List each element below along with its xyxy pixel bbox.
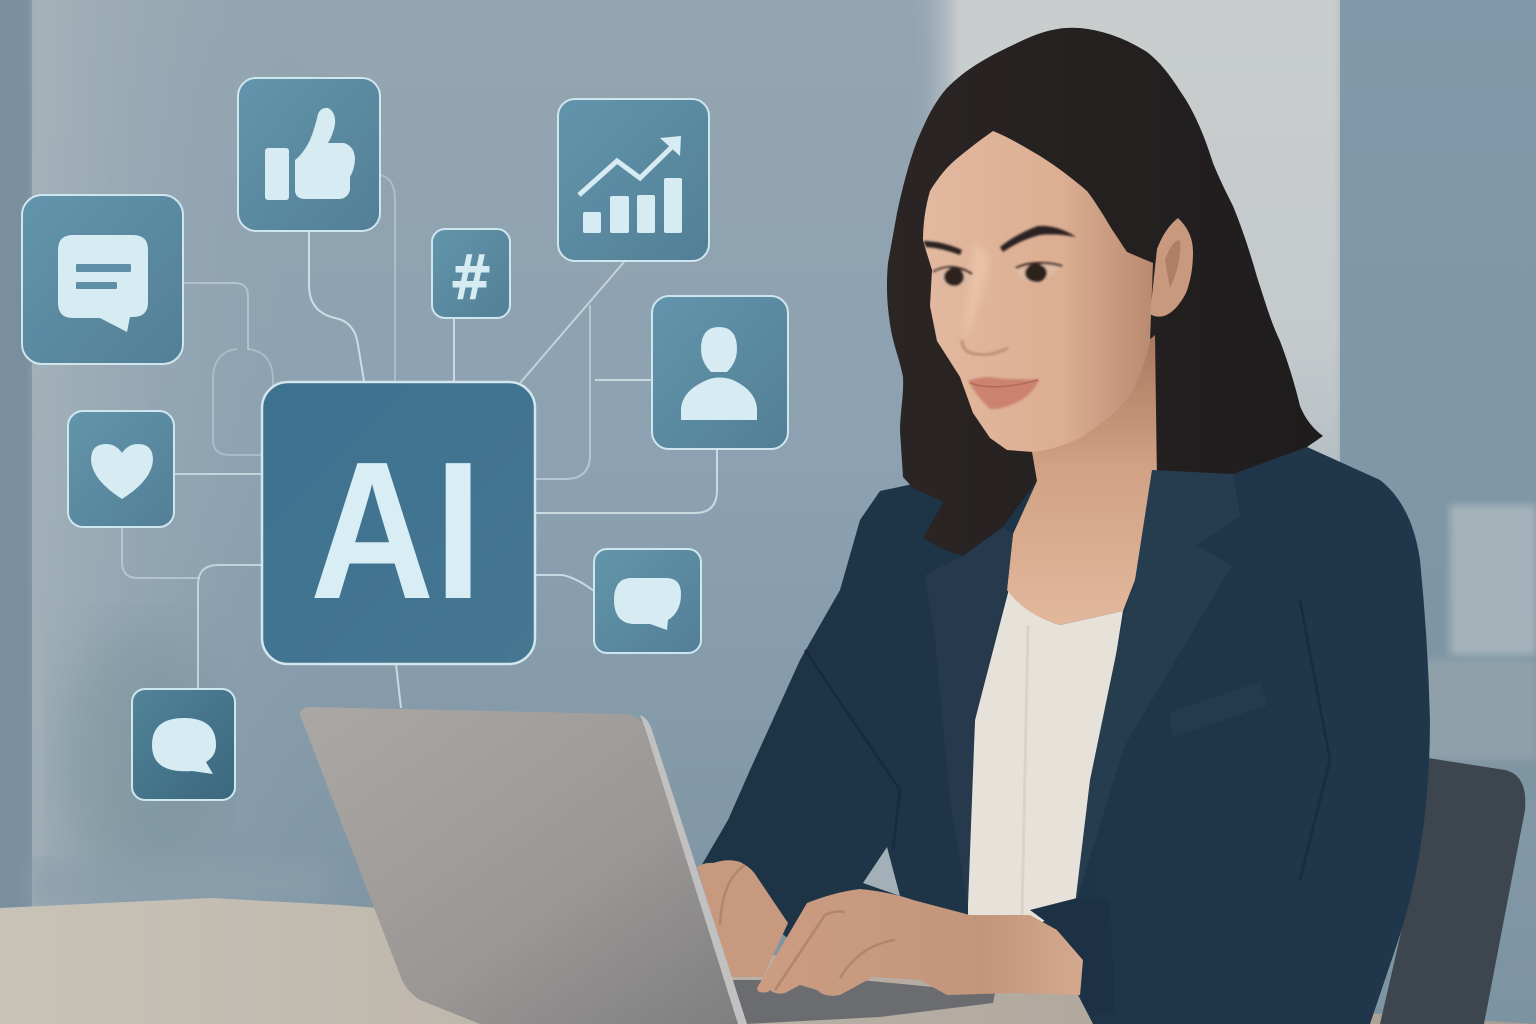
tile: thumbs up [238,78,380,231]
icon: person [681,327,757,420]
face [923,131,1153,452]
tile: user profile [652,296,788,449]
jacket body [700,447,1430,1024]
pocket flap [1170,682,1268,738]
icon: speech bubble with text lines [58,235,148,332]
eyes [933,263,1062,287]
icon: heart [91,444,153,499]
tile: speech bubble lower left [132,689,235,800]
connector lines [122,175,717,708]
laptop lid [300,707,747,1024]
chair [1380,758,1525,1024]
nose [962,340,1008,355]
cuff [1030,898,1115,1017]
sleeve and seams [805,650,900,850]
blouse [968,585,1123,930]
right hand [757,889,1083,996]
tile: heart [68,411,174,527]
eyebrows [923,226,1076,255]
left lapel [925,527,1013,905]
left hand [697,860,788,977]
icon: round speech bubble [152,718,216,774]
lips [968,377,1040,409]
ear [1150,218,1193,317]
gap between arm and body [863,847,900,896]
hands [697,860,1083,996]
icon: bars and rising arrow [579,136,682,233]
cheek and nose shading [963,240,990,340]
tile: growth chart [558,99,709,261]
woman [700,28,1430,1024]
AI label: AI [310,421,482,640]
tile: speech bubble right [594,549,701,653]
neck [1007,335,1157,625]
icon: speech bubble [614,578,681,630]
desk [0,898,1536,1024]
central AI tile [262,382,535,664]
right lapel [1075,470,1240,905]
icon: thumbs up [265,108,355,200]
icon: hashtag: # [449,241,493,314]
tile: chat message [22,195,183,364]
tile: hashtag [432,229,510,318]
hair [887,28,1323,556]
laptop base [733,980,995,1024]
finger lines [720,865,895,990]
